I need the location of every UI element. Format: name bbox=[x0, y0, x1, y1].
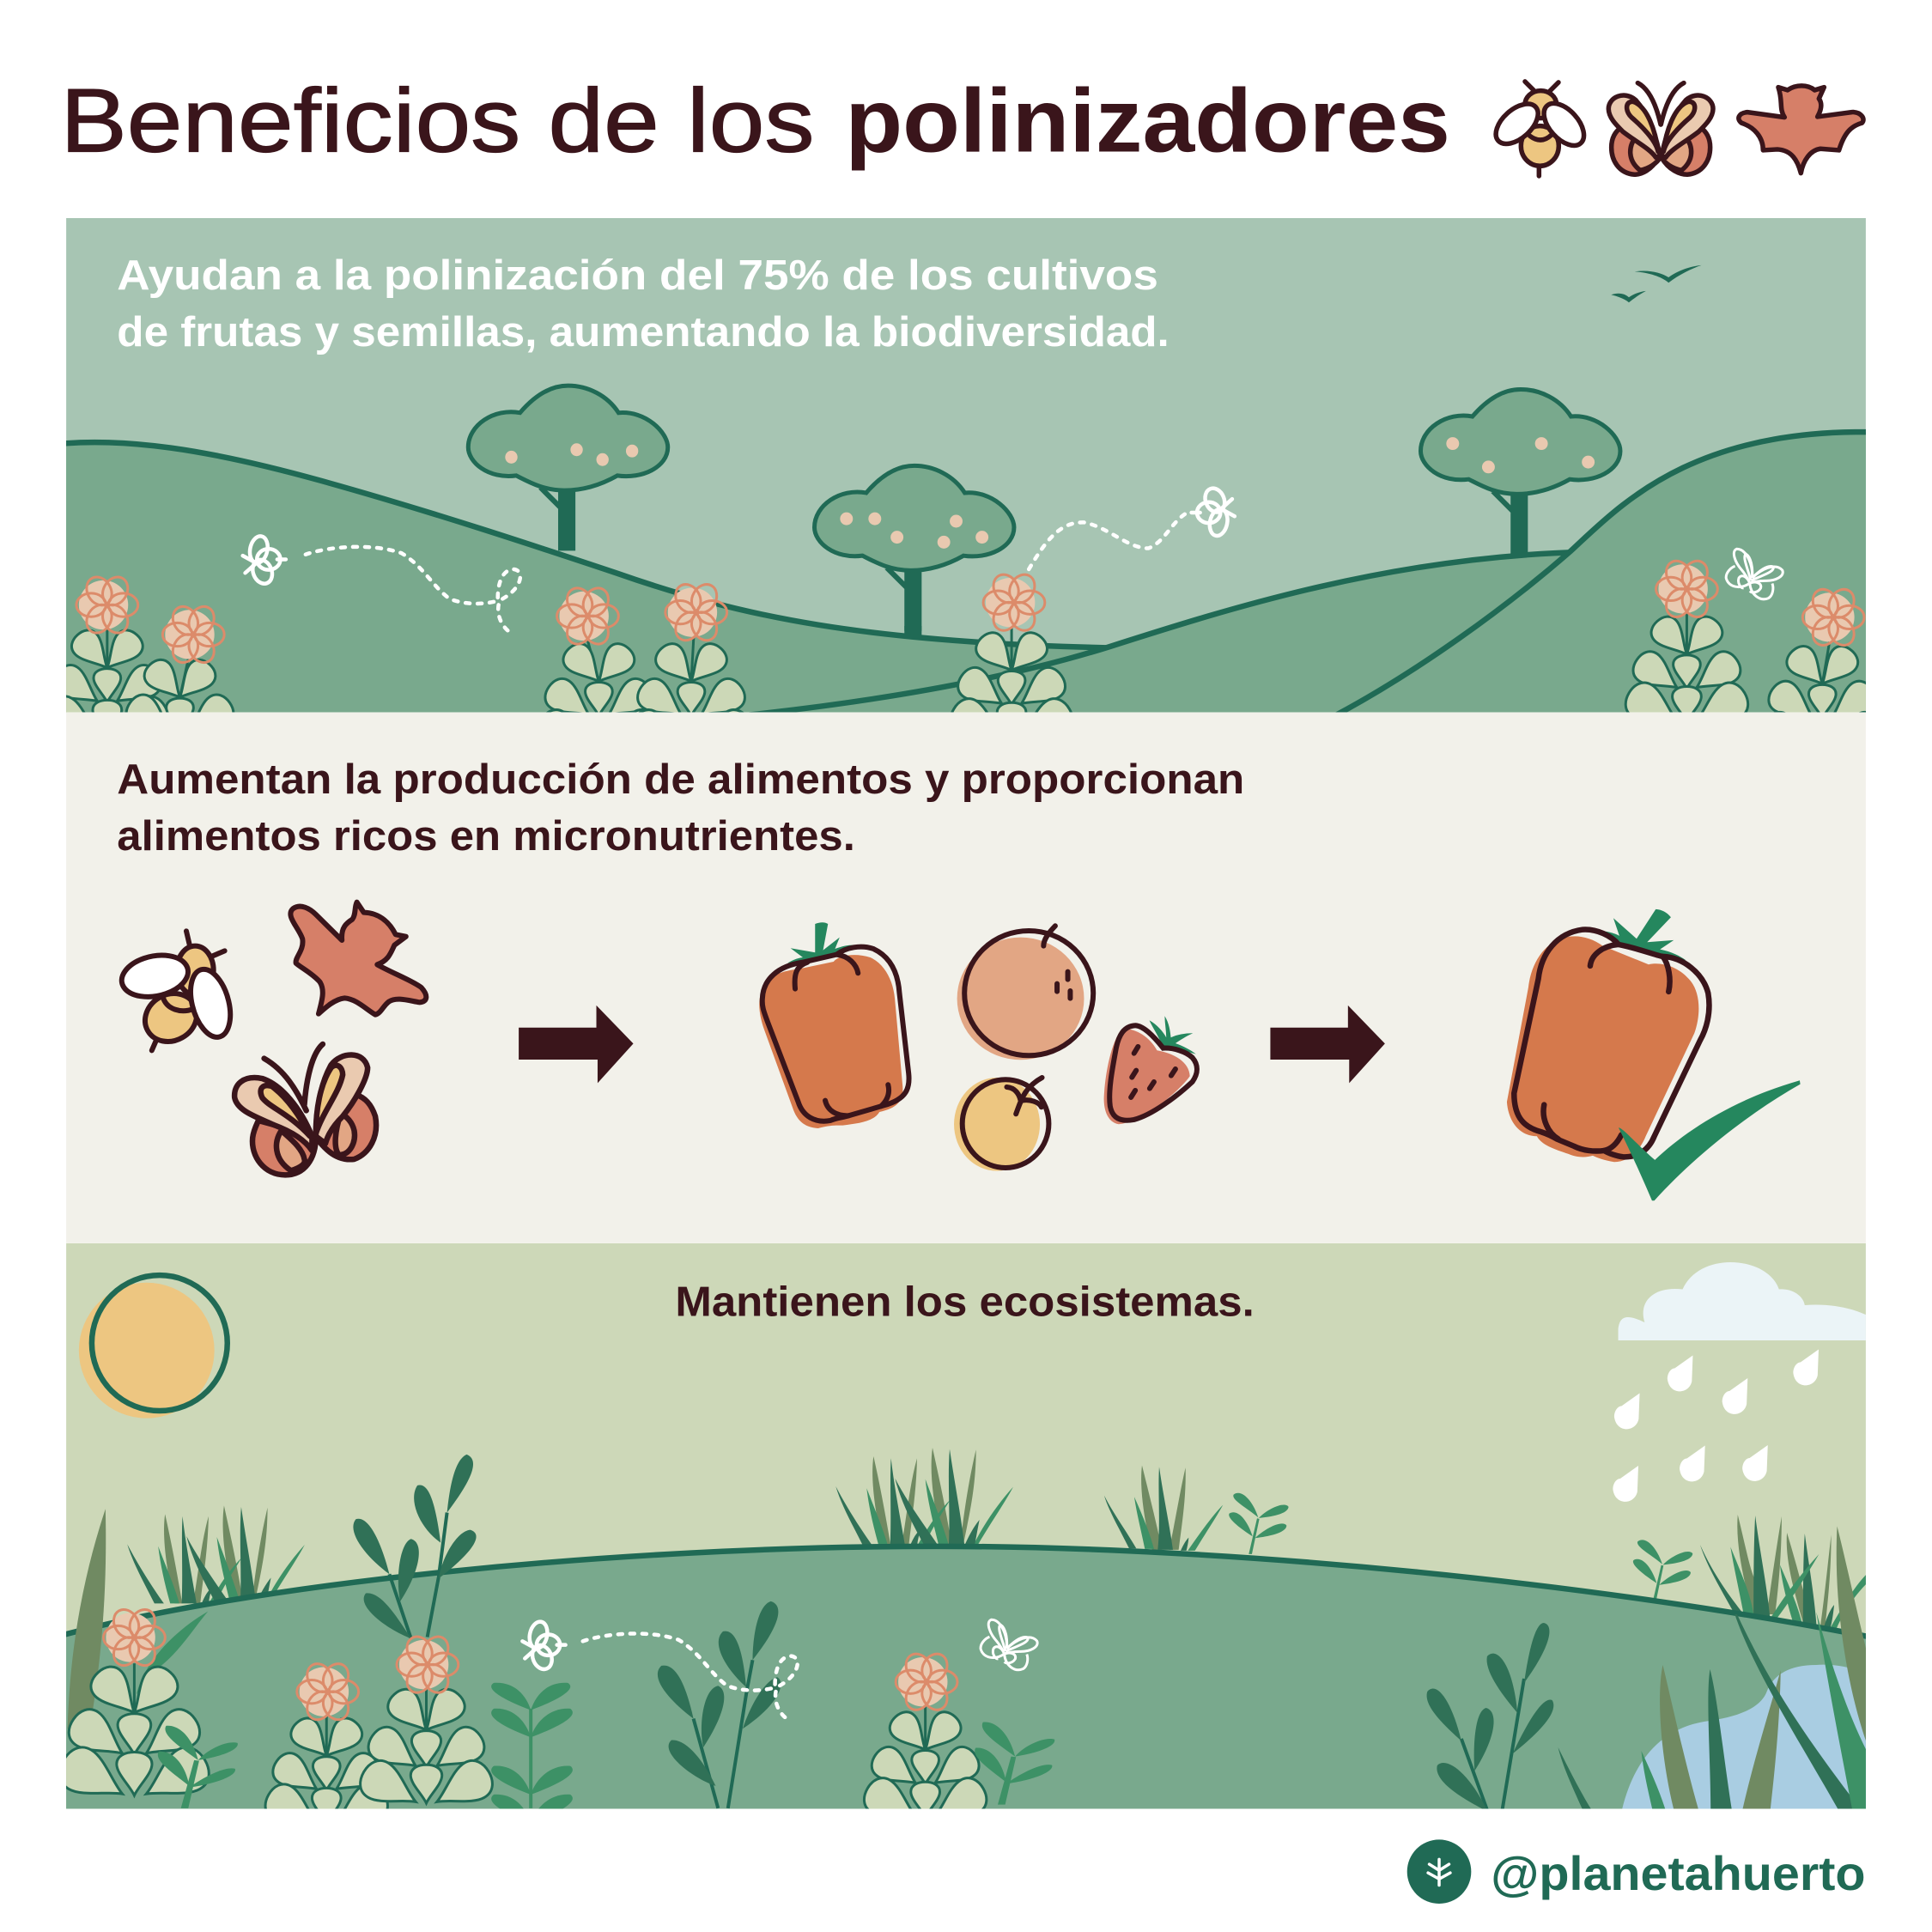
tree 2 bbox=[815, 465, 1014, 638]
icon: birds bbox=[1611, 265, 1702, 302]
heading: ecosystems: Mantienen los ecosistemas. bbox=[675, 1279, 1255, 1326]
icon: butterfly bbox=[234, 1044, 376, 1175]
tall sprig bbox=[353, 1455, 477, 1638]
icon: bat bbox=[1739, 86, 1863, 173]
flower plant centre-left bbox=[259, 1659, 393, 1838]
green sprig bbox=[491, 1683, 573, 1823]
flower plant 3 bbox=[544, 586, 645, 713]
hill bbox=[49, 1546, 1885, 1824]
butterfly outline bbox=[975, 1619, 1039, 1674]
grass tuft right bbox=[1700, 1515, 1868, 1631]
small green sprig centre bbox=[975, 1722, 1054, 1805]
icon: bat bbox=[290, 902, 426, 1015]
title: polinizadores bbox=[845, 70, 1450, 171]
panel: ecosystems bbox=[49, 1243, 1885, 1838]
flower plant 4 bbox=[636, 583, 746, 713]
grass tuft left bbox=[127, 1505, 305, 1603]
panel: food production bbox=[66, 712, 1866, 1243]
pond with reeds bbox=[1558, 1526, 1868, 1812]
arrow 1 bbox=[519, 1005, 634, 1083]
icon: strawberry bbox=[1104, 1016, 1197, 1124]
arrow 2 bbox=[1270, 1005, 1385, 1083]
grass tuft centre bbox=[835, 1448, 1013, 1546]
dark sprig centre bbox=[658, 1601, 781, 1808]
tall blades left bbox=[68, 1509, 208, 1728]
heading: food production: Aumentan la producción de alimentos y proporcionan bbox=[117, 756, 1244, 803]
footer logo bbox=[1407, 1839, 1471, 1904]
flower plant 1 bbox=[66, 575, 167, 713]
title bbox=[60, 70, 1450, 171]
icon: bee bbox=[112, 931, 237, 1050]
bee flight path 3 bbox=[522, 1620, 798, 1720]
small green sprig left bbox=[158, 1726, 238, 1808]
flower plant tall bbox=[354, 1632, 499, 1819]
icon: orange bbox=[957, 926, 1093, 1060]
sprout on hilltop bbox=[1229, 1493, 1289, 1554]
icon: pepper bbox=[759, 922, 909, 1128]
tree 3 bbox=[1420, 389, 1620, 555]
heading: biodiversity: Ayudan a la polinización del 75% de los cultivos bbox=[117, 252, 1158, 299]
flower plant 2 bbox=[125, 605, 235, 713]
bee flight path 1 bbox=[243, 534, 520, 634]
flower plant centre bbox=[858, 1649, 993, 1832]
icon: large pepper with check bbox=[1507, 909, 1801, 1200]
flower plant 5 bbox=[951, 574, 1072, 713]
dark sprig right bbox=[1427, 1623, 1553, 1812]
heading: biodiversity bbox=[117, 252, 1170, 355]
sprout right bbox=[1633, 1540, 1692, 1601]
icon: butterfly bbox=[1608, 83, 1713, 174]
icon: cloud with rain bbox=[1613, 1262, 1868, 1502]
handle: @planetahuerto bbox=[1491, 1847, 1866, 1900]
hill: middle bbox=[749, 550, 1568, 713]
bee flight path 2 bbox=[1029, 485, 1235, 569]
hill: right bbox=[1335, 429, 1866, 713]
tree 1 bbox=[468, 386, 668, 550]
flower plant large left bbox=[52, 1605, 216, 1814]
title: Beneficios de los bbox=[60, 70, 815, 171]
butterfly outline bbox=[1721, 548, 1784, 603]
grass tuft small bbox=[1104, 1466, 1223, 1551]
heading: food production bbox=[118, 762, 1242, 850]
flower plant 6 bbox=[1625, 560, 1750, 713]
flower plant 7 bbox=[1767, 587, 1866, 713]
heading: food production: alimentos ricos en micronutrientes. bbox=[117, 812, 855, 860]
icon: sun bbox=[79, 1275, 228, 1419]
checkmark bbox=[1619, 1080, 1801, 1200]
icon: yellow fruit bbox=[954, 1078, 1048, 1171]
icon: bee bbox=[1489, 82, 1591, 176]
heading: biodiversity: de frutas y semillas, aumentando la biodiversidad. bbox=[117, 308, 1170, 355]
panel: biodiversity landscape bbox=[66, 218, 1866, 713]
hill: left bbox=[49, 442, 1124, 727]
